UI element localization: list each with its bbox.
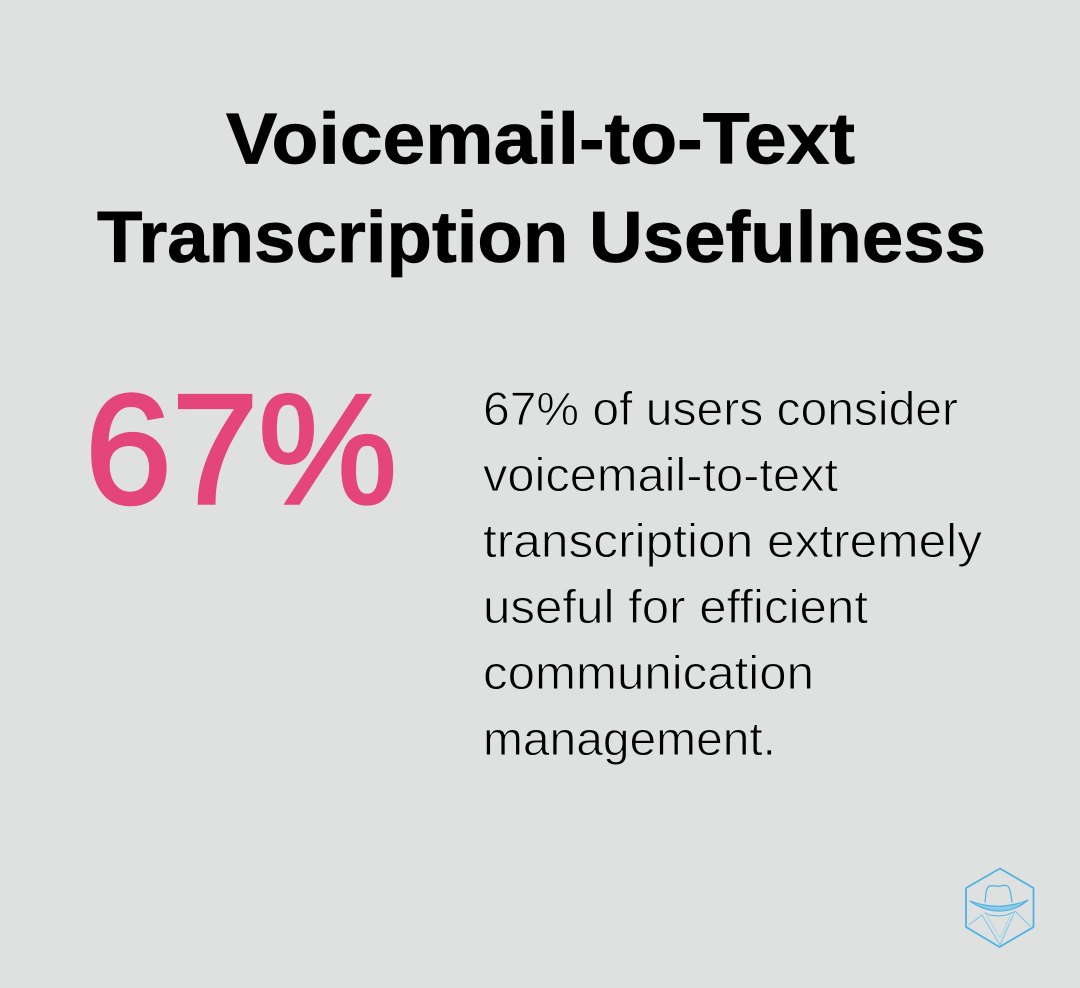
description text: management. [483, 712, 776, 765]
title [97, 100, 986, 278]
icon: coat collar [969, 911, 1030, 945]
description text [483, 382, 983, 765]
description text: voicemail-to-text [483, 448, 838, 501]
description text: useful for efficient [483, 580, 868, 633]
description text: 67% of users consider [483, 382, 958, 435]
description text: transcription extremely [483, 514, 983, 567]
icon: hat [970, 885, 1028, 916]
icon: logo hexagon with hat and coat [966, 868, 1034, 947]
title: Transcription Usefulness [97, 198, 986, 278]
big statistic: 67%: 67% [85, 363, 397, 537]
icon: hexagon outline [966, 868, 1034, 947]
title: Voicemail-to-Text [226, 100, 855, 180]
description text: communication [483, 646, 814, 699]
